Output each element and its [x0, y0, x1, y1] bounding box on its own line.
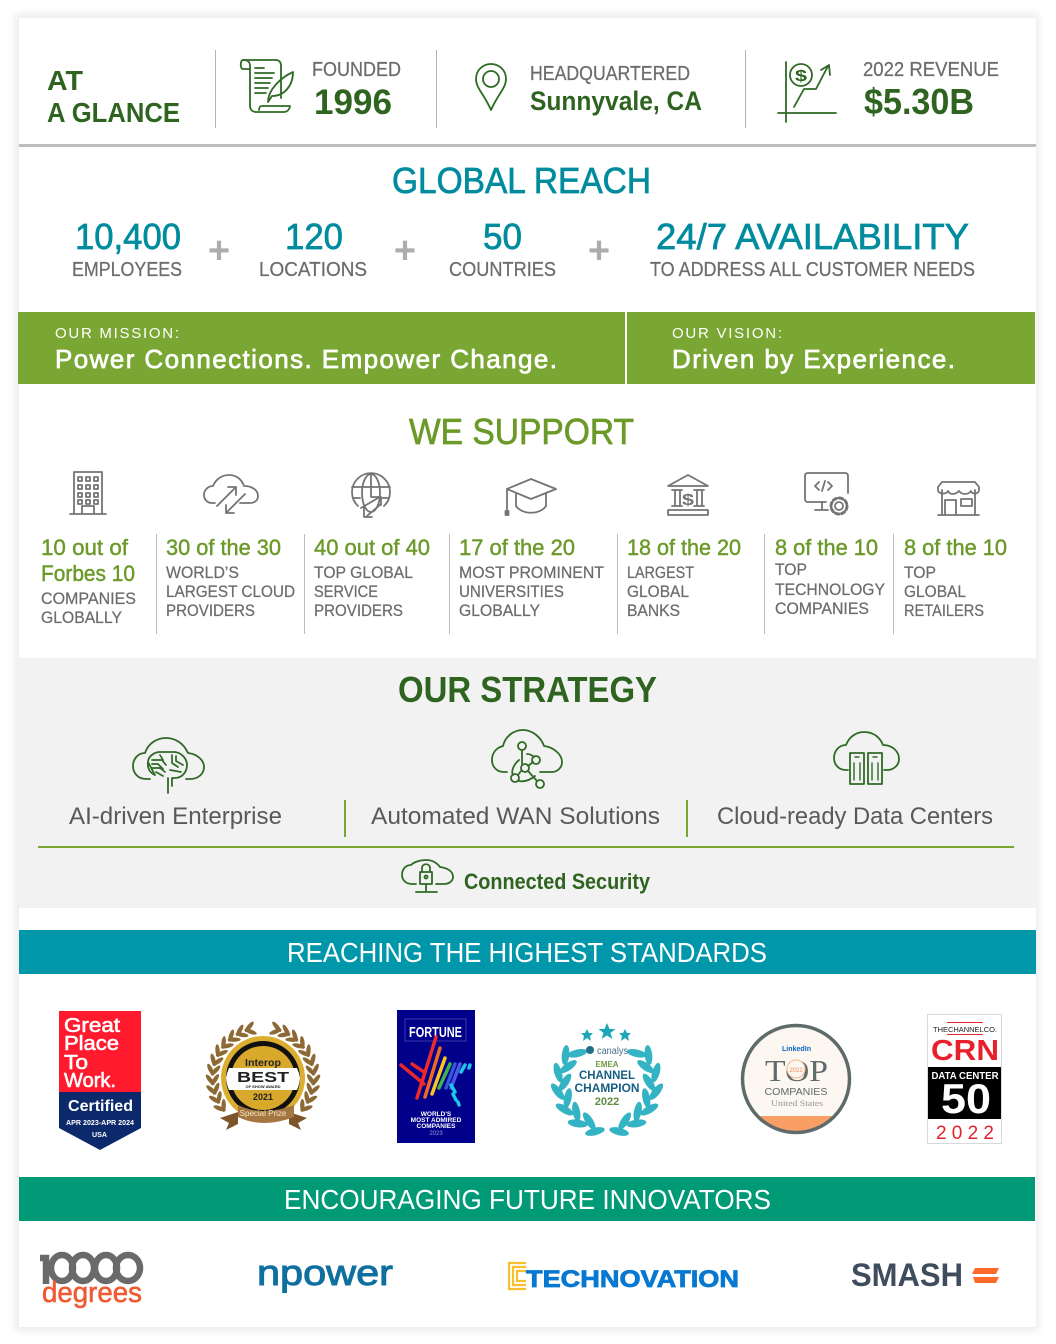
item: technology companies: [775, 535, 885, 618]
item: technology companies: TOP: [775, 560, 807, 579]
badge: linkedin top companies: TOP: [765, 1053, 828, 1088]
text: cloud-ready data centers: Cloud-ready Data Centers: [717, 803, 993, 830]
badge: great place to work: Great: [64, 1015, 120, 1037]
heading: global reach: GLOBAL REACH: [392, 160, 651, 201]
logo: smash: SMASH: [851, 1257, 963, 1293]
stat: founded: [312, 59, 401, 122]
text: mission: Power Connections. Empower Change.: [55, 344, 557, 374]
panel: our strategy: [19, 658, 1036, 908]
item: retailers: 8 of the 10: [904, 535, 1007, 560]
badge: great place to work: Place: [64, 1033, 119, 1055]
badge: interop best of show: OF SHOW AWARD: [246, 1084, 281, 1089]
banner: reaching the highest standards: [19, 930, 1036, 974]
badge: linkedin top companies: United States: [771, 1099, 823, 1108]
badge: fortune most admired: 2023: [429, 1131, 443, 1137]
badge: great place to work: USA: [92, 1132, 107, 1139]
badge: great place to work: Certified: [68, 1098, 133, 1115]
badge: interop best of show: 2021: [253, 1092, 273, 1102]
badge: linkedin top companies: COMPANIES: [764, 1087, 828, 1098]
stat: availability: 24/7 AVAILABILITY: [656, 216, 969, 257]
icon: graduation cap: [506, 479, 556, 515]
item: banks: 18 of the 20: [627, 535, 741, 560]
item: cloud providers: 30 of the 30: [166, 535, 281, 560]
badge: fortune most admired: WORLD'S: [421, 1111, 452, 1118]
panel: we support: [41, 411, 1007, 634]
icon: globe with arrows: [352, 473, 390, 517]
badge: CRN data center 50: [928, 1014, 1002, 1144]
item: technology companies: TECHNOLOGY: [775, 580, 885, 599]
badge: great place to work: APR 2023-APR 2024: [66, 1120, 134, 1127]
text: vision: OUR VISION:: [672, 325, 782, 342]
stat: employees: [72, 216, 182, 281]
item: retailers: [904, 535, 1007, 620]
plus sign: +: [394, 230, 416, 272]
panel: at a glance header: [47, 50, 999, 128]
banner: encouraging future innovators: [19, 1177, 1035, 1221]
heading: our strategy: OUR STRATEGY: [398, 669, 657, 710]
item: universities: [459, 535, 604, 620]
heading: at a glance: AT: [47, 65, 83, 96]
badge: interop best of show: Interop: [245, 1058, 281, 1069]
panel: mission and vision band: [18, 312, 1035, 384]
text: vision: Driven by Experience.: [672, 344, 955, 374]
stat: countries: 50: [483, 216, 522, 257]
item: service providers: SERVICE: [314, 582, 378, 601]
item: forbes 10: Forbes 10: [41, 561, 135, 586]
item: forbes 10: [41, 535, 136, 627]
stat: founded: 1996: [314, 83, 392, 122]
heading: we support: WE SUPPORT: [409, 411, 634, 452]
stat: countries: COUNTRIES: [449, 259, 556, 281]
text: AI-driven enterprise: AI-driven Enterprise: [69, 803, 282, 830]
badge: CRN data center 50: CRN: [931, 1035, 999, 1067]
item: service providers: [314, 535, 430, 620]
text: mission: [55, 325, 557, 374]
badge: linkedin top companies: LinkedIn: [782, 1046, 811, 1053]
item: cloud providers: LARGEST CLOUD: [166, 582, 295, 601]
logo: technovation: TECHNOVATION: [526, 1266, 739, 1293]
item: retailers: TOP: [904, 563, 936, 582]
icon: network cloud: [492, 730, 562, 788]
item: retailers: RETAILERS: [904, 601, 984, 620]
stat: revenue: $5.30B: [864, 81, 974, 122]
text: vision: [672, 325, 955, 374]
plus sign: +: [588, 230, 610, 272]
item: banks: BANKS: [627, 601, 680, 620]
icon: scroll and quill: [241, 60, 293, 112]
item: banks: LARGEST: [627, 563, 694, 582]
item: banks: [627, 535, 741, 620]
badge: fortune most admired: MOST ADMIRED: [411, 1117, 462, 1124]
item: cloud providers: WORLD’S: [166, 563, 239, 582]
icon: brain cloud: [133, 738, 204, 793]
stat: countries: [449, 216, 556, 281]
item: retailers: GLOBAL: [904, 582, 966, 601]
badge: great place to work: Work.: [64, 1070, 116, 1092]
item: technology companies: 8 of the 10: [775, 535, 878, 560]
logo: 10,000 degrees: degrees: [42, 1277, 142, 1309]
item: universities: 17 of the 20: [459, 535, 575, 560]
badge: canalys channel champion: 2022: [595, 1096, 619, 1108]
banner: encouraging future innovators: ENCOURAGING FUTURE INNOVATORS: [284, 1184, 771, 1215]
item: service providers: 40 out of 40: [314, 535, 430, 560]
item: cloud providers: PROVIDERS: [166, 601, 255, 620]
panel: at a glance header: $: [795, 68, 807, 85]
item: universities: MOST PROMINENT: [459, 563, 604, 582]
item: cloud providers: [166, 535, 295, 620]
stat: employees: EMPLOYEES: [72, 259, 182, 281]
badge: CRN data center 50: 2022: [936, 1123, 994, 1144]
badge: canalys channel champion: CHANNEL: [579, 1070, 635, 1082]
panel: we support: $: [682, 492, 694, 509]
icon: revenue chart: [778, 62, 836, 122]
badge: fortune most admired: FORTUNE: [409, 1024, 462, 1041]
badge: CRN data center 50: THECHANNELCO.: [933, 1027, 997, 1034]
icon: data center cloud: [834, 732, 899, 784]
plus sign: +: [208, 230, 230, 272]
logo: 10,000 degrees: [40, 1255, 142, 1309]
item: banks: GLOBAL: [627, 582, 689, 601]
icon: storefront: [938, 482, 979, 515]
icon: cloud with arrows: [204, 475, 258, 513]
icon: security cloud: [402, 860, 453, 892]
heading: at a glance: A GLANCE: [47, 97, 180, 128]
badge: great place to work: [59, 1011, 141, 1150]
badge: great place to work: To: [64, 1052, 88, 1074]
stat: headquartered: HEADQUARTERED: [530, 63, 690, 85]
item: universities: GLOBALLY: [459, 601, 540, 620]
badge: CRN data center 50: 50: [941, 1075, 991, 1122]
badge: canalys channel champion: [549, 1023, 665, 1138]
panel: global reach: [72, 160, 975, 281]
stat: availability: TO ADDRESS ALL CUSTOMER NEEDS: [650, 259, 975, 281]
logo: npower: npower: [257, 1252, 393, 1293]
item: technology companies: COMPANIES: [775, 599, 869, 618]
text: connected security: Connected Security: [464, 869, 651, 894]
item: universities: UNIVERSITIES: [459, 582, 564, 601]
stat: founded: FOUNDED: [312, 59, 401, 81]
heading: at a glance: [47, 65, 180, 128]
badge: linkedin top companies: [742, 1025, 850, 1133]
stat: revenue: 2022 REVENUE: [863, 59, 999, 81]
badge: CRN data center 50: DATA CENTER: [932, 1071, 999, 1082]
badge: canalys channel champion: canalys: [597, 1046, 628, 1057]
item: service providers: TOP GLOBAL: [314, 563, 413, 582]
icon: location pin: [476, 64, 506, 110]
item: forbes 10: 10 out of: [41, 535, 129, 560]
icon: office building: [70, 472, 106, 514]
stat: locations: 120: [285, 216, 343, 257]
item: forbes 10: COMPANIES: [41, 589, 136, 608]
stat: availability: [650, 216, 975, 281]
stat: headquartered: [530, 63, 702, 116]
badge: interop best of show: Special Prize: [240, 1109, 287, 1118]
stat: headquartered: Sunnyvale, CA: [530, 86, 702, 116]
item: service providers: PROVIDERS: [314, 601, 403, 620]
item: forbes 10: GLOBALLY: [41, 608, 122, 627]
badge: fortune most admired: COMPANIES: [417, 1123, 456, 1130]
icon: monitor with gear: [805, 473, 848, 514]
badge: fortune most admired: [397, 1010, 475, 1143]
text: mission: OUR MISSION:: [55, 325, 179, 342]
stat: revenue: [863, 59, 999, 122]
stat: locations: [259, 216, 367, 281]
badge: canalys channel champion: CHAMPION: [574, 1083, 640, 1095]
stat: locations: LOCATIONS: [259, 259, 367, 281]
badge: interop best of show: [204, 1020, 322, 1130]
banner: reaching the highest standards: REACHING THE HIGHEST STANDARDS: [287, 937, 767, 968]
text: automated wan solutions: Automated WAN Solutions: [371, 803, 660, 830]
badge: linkedin top companies: 2022: [789, 1068, 803, 1074]
badge: canalys channel champion: EMEA: [595, 1060, 619, 1069]
icon: bank: [668, 475, 708, 515]
stat: employees: 10,400: [75, 216, 181, 257]
badge: interop best of show: BEST: [237, 1069, 289, 1086]
